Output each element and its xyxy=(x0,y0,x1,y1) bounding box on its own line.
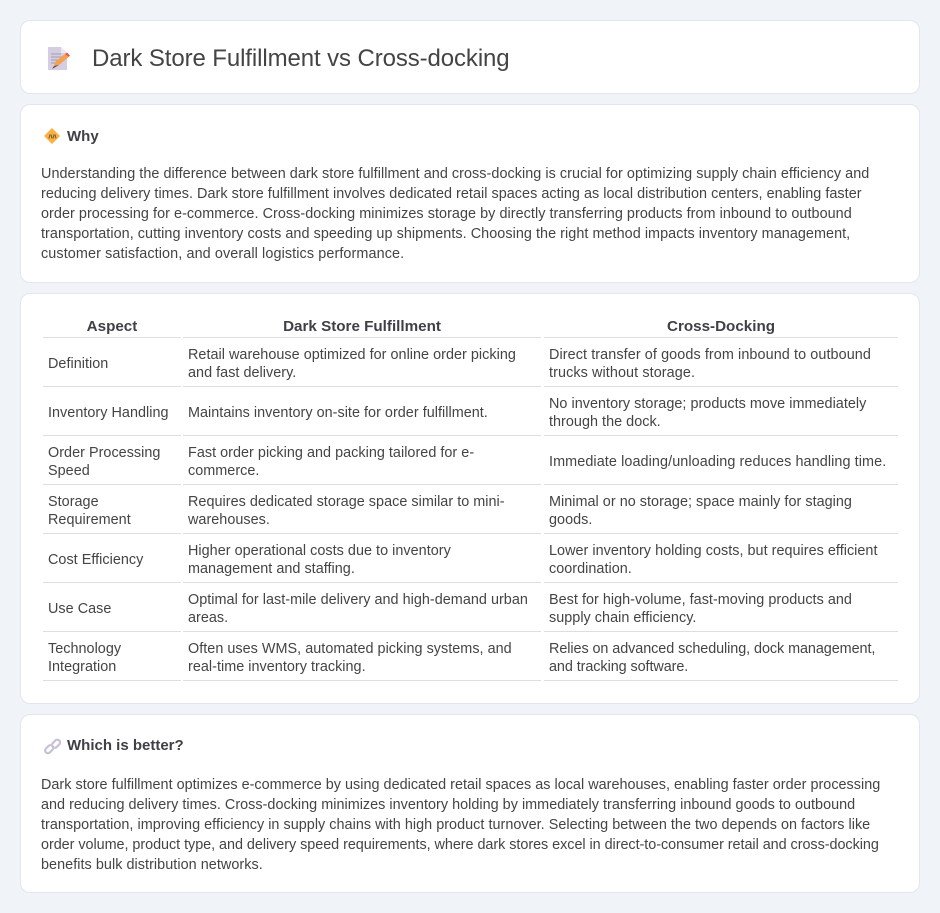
comparison table: Retail warehouse optimized for online order picking xyxy=(188,347,516,363)
column header: Cross-Docking: Cross-Docking xyxy=(667,318,775,335)
comparison table: No inventory storage; products move immediately xyxy=(549,396,866,412)
text: which is better paragraph: transportation, improving efficiency in supply chains with high product turnover. Selecting between the two depends on factors like xyxy=(41,817,870,833)
comparison table: coordination. xyxy=(549,561,632,577)
text: which is better paragraph: Dark store fulfillment optimizes e-commerce by using dedicated retail spaces as local warehouses, enabling faster order processing xyxy=(41,777,880,793)
comparison table: areas. xyxy=(188,610,228,626)
row: Order Processing Speed xyxy=(48,445,160,479)
panel: title xyxy=(20,20,920,94)
comparison table: and fast delivery. xyxy=(188,365,296,381)
text: why paragraph: order processing for e-commerce. Cross-docking minimizes storage by directly transferring products from inbound to outbound xyxy=(41,206,852,222)
comparison table: commerce. xyxy=(188,463,259,479)
comparison table: management and staffing. xyxy=(188,561,355,577)
row: Technology Integration xyxy=(48,641,121,675)
comparison table: Relies on advanced scheduling, dock management, xyxy=(549,641,875,657)
icon: warning diamond xyxy=(44,128,60,144)
comparison table: goods. xyxy=(549,512,592,528)
comparison table: warehouses. xyxy=(188,512,270,528)
comparison table: through the dock. xyxy=(549,414,661,430)
row: Cost Efficiency: Cost Efficiency xyxy=(48,552,143,568)
comparison table xyxy=(43,318,898,681)
column header: Aspect: Aspect xyxy=(87,318,137,335)
row: Inventory Handling: Inventory Handling xyxy=(48,405,169,421)
comparison table: Minimal or no storage; space mainly for staging xyxy=(549,494,852,510)
text: which is better paragraph: benefits bulk distribution networks. xyxy=(41,857,263,873)
comparison table: Requires dedicated storage space similar to mini- xyxy=(188,494,505,510)
comparison table: and tracking software. xyxy=(549,659,688,675)
comparison table: Immediate loading/unloading reduces handling time. xyxy=(549,454,886,470)
comparison table: Higher operational costs due to inventory xyxy=(188,543,451,559)
heading: which is better: Which is better? xyxy=(67,737,184,754)
comparison table: Optimal for last-mile delivery and high-demand urban xyxy=(188,592,528,608)
row: Order Processing Speed: Order Processing xyxy=(48,445,160,461)
text: which is better paragraph: order volume, product type, and delivery speed requirements, where dark stores excel in direct-to-consumer retail and cross-docking xyxy=(41,837,879,853)
comparison table: Lower inventory holding costs, but requires efficient xyxy=(549,543,878,559)
row: Order Processing Speed: Speed xyxy=(48,463,90,479)
comparison table: real-time inventory tracking. xyxy=(188,659,366,675)
comparison table: Maintains inventory on-site for order fulfillment. xyxy=(188,405,488,421)
column header: Dark Store Fulfillment: Dark Store Fulfillment xyxy=(283,318,441,335)
comparison table: Best for high-volume, fast-moving products and xyxy=(549,592,852,608)
row: Storage Requirement: Requirement xyxy=(48,512,131,528)
panel: which is better xyxy=(20,714,920,893)
icon: chain link xyxy=(44,738,61,754)
row: Storage Requirement: Storage xyxy=(48,494,99,510)
comparison table: Often uses WMS, automated picking systems, and xyxy=(188,641,512,657)
comparison table: Fast order picking and packing tailored for e- xyxy=(188,445,474,461)
text: why paragraph: customer satisfaction, and overall logistics performance. xyxy=(41,246,404,262)
text: why paragraph: reducing delivery times. Dark store fulfillment involves dedicated retail spaces acting as local distribution centers, enabling faster xyxy=(41,186,862,202)
text: which is better paragraph xyxy=(41,777,880,873)
panel: why xyxy=(20,104,920,283)
text: why paragraph: transportation, cutting inventory costs and speeding up shipments. Choosing the right method impacts inventory management, xyxy=(41,226,850,242)
comparison table: trucks without storage. xyxy=(549,365,695,381)
icon: document with pencil xyxy=(48,47,70,70)
row: Storage Requirement xyxy=(48,494,131,528)
text: why paragraph: Understanding the difference between dark store fulfillment and cross-docking is crucial for optimizing supply chain efficiency and xyxy=(41,166,869,182)
panel: comparison table xyxy=(20,293,920,704)
heading: why: Why xyxy=(67,128,99,145)
title text: Dark Store Fulfillment vs Cross-docking xyxy=(92,45,510,72)
comparison table: Direct transfer of goods from inbound to outbound xyxy=(549,347,871,363)
text: which is better paragraph: and reducing delivery times. Cross-docking minimizes inventory holding by immediately transferring inbound goods to outbound xyxy=(41,797,855,813)
row: Technology Integration: Technology xyxy=(48,641,121,657)
text: why paragraph xyxy=(41,166,869,262)
row: Technology Integration: Integration xyxy=(48,659,116,675)
row: Definition: Definition xyxy=(48,356,108,372)
comparison table: supply chain efficiency. xyxy=(549,610,696,626)
row: Use Case: Use Case xyxy=(48,601,111,617)
